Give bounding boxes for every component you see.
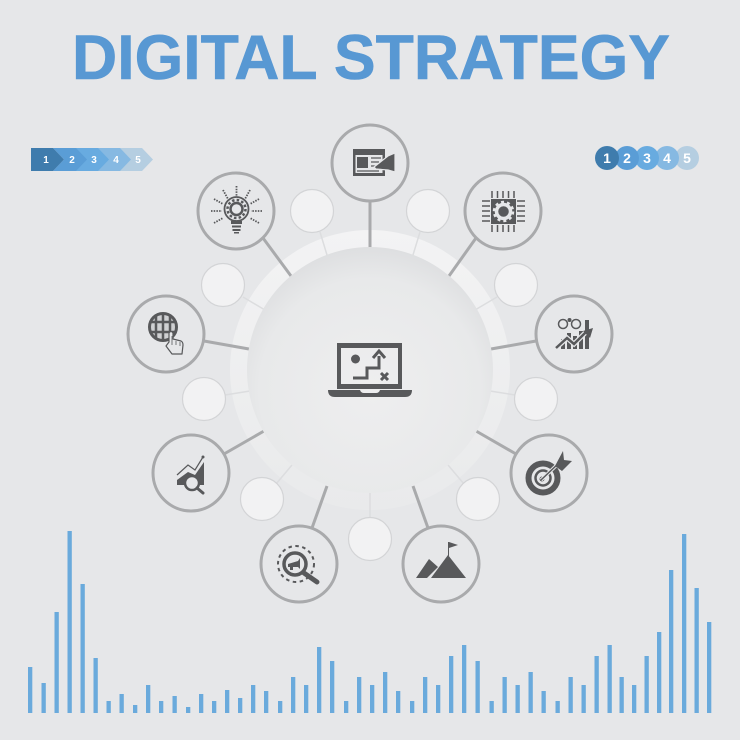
icon: mountain with flag [416,542,466,578]
step arrows legend: 2 [69,155,75,166]
numbered circles legend: 1 [603,150,611,166]
icon: laptop with strategy path [328,343,412,397]
central ring [230,230,510,510]
numbered circles legend: 4 [663,150,671,166]
numbered circles legend: 2 [623,150,631,166]
icon: binoculars and growth chart [556,318,593,349]
step arrows legend: 5 [135,155,141,166]
icon: browser and megaphone [353,149,395,176]
icon: target with arrow [528,451,572,492]
icon: chart with magnifier [177,456,204,493]
numbered circles legend: 3 [643,150,651,166]
numbered circles legend: 5 [683,150,691,166]
small circle connectors [225,232,515,517]
icon: chip with gear [482,191,525,232]
step arrows legend: 4 [113,155,119,166]
icon: magnifier with megaphone [278,546,317,582]
step arrows legend: 1 [43,155,49,166]
node rings [128,125,612,602]
step arrows legend: 3 [91,155,97,166]
small empty circles [182,190,558,560]
numbered circles legend [595,146,699,170]
icon: light bulb with gear [211,186,262,234]
central hub with laptop icon [247,247,493,493]
main connectors [204,201,536,528]
step arrows legend [31,148,153,171]
title: DIGITAL STRATEGY [72,23,670,93]
bar chart [28,531,711,713]
icon: globe with hand [150,314,183,354]
